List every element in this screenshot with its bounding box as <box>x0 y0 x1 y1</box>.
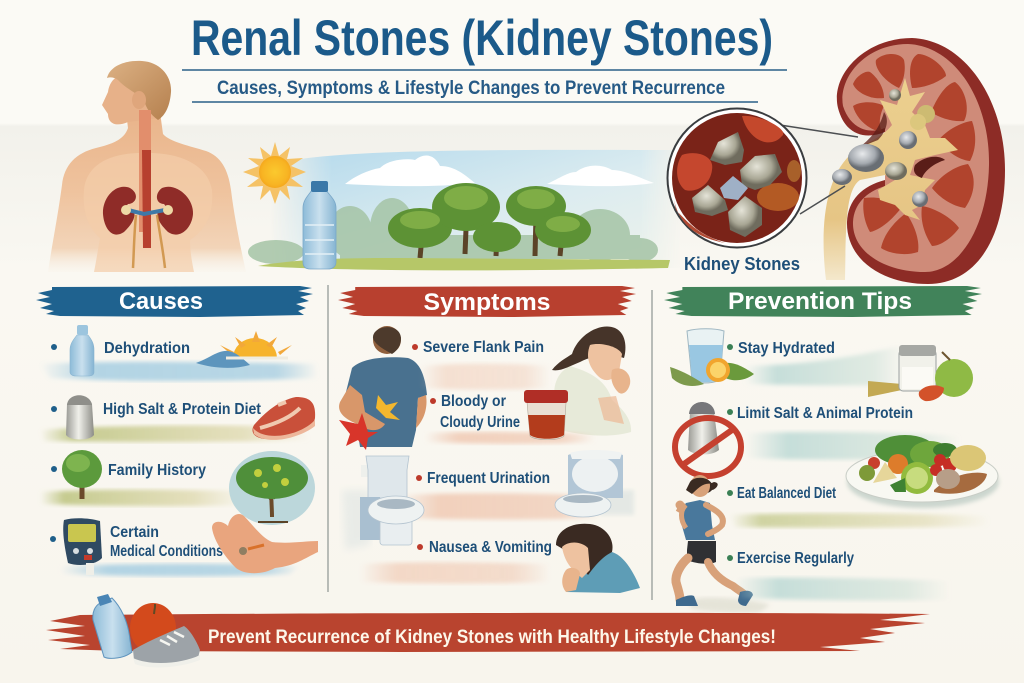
symptom: bloody or cloudy urine: Bloody or <box>441 393 506 410</box>
symptom: nausea and vomiting <box>360 524 640 593</box>
cause: family history: Family History <box>108 462 206 479</box>
symptom: severe flank pain: Severe Flank Pain <box>423 339 544 356</box>
cause: dehydration <box>40 325 318 381</box>
runner figure <box>676 475 770 613</box>
panel: causes <box>36 286 318 576</box>
symptom: frequent urination: Frequent Urination <box>427 470 550 487</box>
cause: dehydration: Dehydration <box>104 340 190 357</box>
tip: balanced diet <box>727 435 999 528</box>
cause: family history <box>40 450 315 525</box>
prevention heading text: Prevention Tips <box>728 288 912 315</box>
left toilet <box>360 456 424 545</box>
illustration: human torso with kidneys <box>48 61 246 272</box>
tip: stay hydrated: Stay Hydrated <box>738 340 835 357</box>
clouds <box>345 155 654 186</box>
illustration: kidney cross-section <box>824 38 1005 284</box>
green trees <box>388 183 591 258</box>
label: Kidney Stones: Kidney Stones <box>684 254 800 274</box>
icon: sun <box>243 142 306 204</box>
tip: exercise regularly <box>727 550 950 600</box>
bottom banner: Prevent Recurrence of Kidney Stones with Healthy Lifestyle Changes! <box>208 627 776 648</box>
cause: salt and protein <box>40 395 315 442</box>
illustration: magnified stones <box>668 108 858 248</box>
symptom: severe flank pain <box>412 339 550 390</box>
panel: symptoms <box>338 286 640 593</box>
tip: limit salt: Limit Salt & Animal Protein <box>737 405 913 422</box>
cause: certain medical conditions <box>50 514 318 576</box>
title: Renal Stones (Kidney Stones) <box>191 10 773 66</box>
panel: prevention tips <box>664 286 999 613</box>
causes heading: Causes <box>119 288 203 315</box>
illustration: landscape with sun, bottle, trees <box>243 142 680 270</box>
causes heading <box>36 286 313 317</box>
background trees <box>248 198 658 264</box>
icon: no salt sign <box>675 402 741 476</box>
symptom: bloody or cloudy urine <box>425 390 595 444</box>
symptoms heading <box>338 286 636 317</box>
tip: exercise regularly: Exercise Regularly <box>737 550 854 567</box>
bottom banner <box>46 613 930 652</box>
symptom: bloody or cloudy urine: Cloudy Urine <box>440 414 520 431</box>
divider lines <box>328 285 652 600</box>
cause: salt and protein: High Salt & Protein Diet <box>103 401 261 418</box>
symptoms heading text: Symptoms <box>424 289 550 316</box>
prevention heading <box>664 286 982 317</box>
symptom: frequent urination <box>342 450 634 550</box>
tip: balanced diet: Eat Balanced Diet <box>737 485 836 502</box>
cause: certain medical conditions: Certain <box>110 524 159 541</box>
symptom: man with flank pain <box>339 326 427 450</box>
symptom: nausea and vomiting: Nausea & Vomiting <box>429 539 552 556</box>
subtitle: Causes, Symptoms & Lifestyle Changes to Prevent Recurrence <box>217 78 725 99</box>
icon: water bottle <box>303 181 336 269</box>
tip: stay hydrated <box>670 329 973 401</box>
tip: limit salt <box>675 402 960 476</box>
icon: bottle, apple and shoe <box>93 594 200 667</box>
right toilet <box>555 450 623 517</box>
woman with hand at face <box>552 327 631 436</box>
cause: certain medical conditions: Medical Conditions <box>110 543 223 560</box>
